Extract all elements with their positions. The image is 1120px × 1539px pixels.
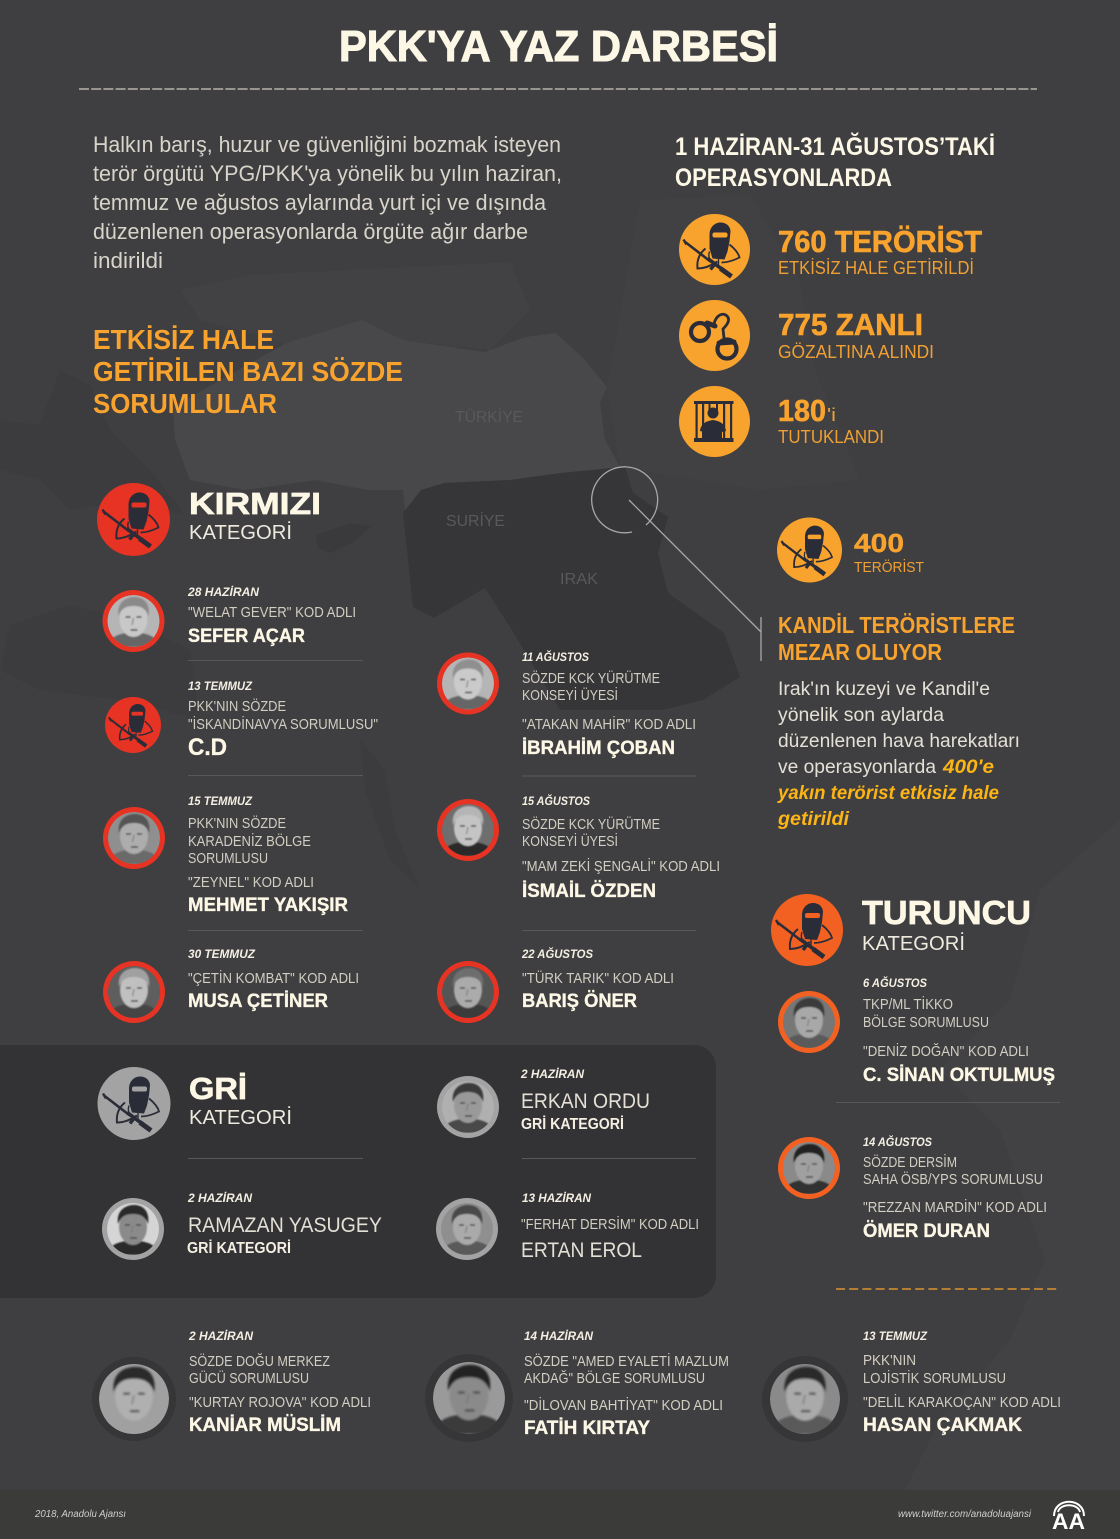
entry: C.D: PKK'NIN SÖZDE xyxy=(188,697,286,715)
entry: Hasan Çakmak xyxy=(762,1329,1061,1442)
entry: Fatih Kırtay: SÖZDE "AMED EYALETİ MAZLUM xyxy=(524,1352,729,1370)
entry: C. Sinan Oktulmuş xyxy=(778,975,1055,1086)
entry: İbrahim Çoban: İBRAHİM ÇOBAN xyxy=(522,736,675,759)
Kandil paragraph: getirildi xyxy=(777,809,850,830)
entry: C. Sinan Oktulmuş: C. SİNAN OKTULMUŞ xyxy=(863,1063,1055,1086)
entry: Ömer Duran: ÖMER DURAN xyxy=(863,1219,990,1242)
heading: neutralized officials: GETİRİLEN BAZI SÖZDE xyxy=(93,356,403,387)
photo xyxy=(436,1198,498,1260)
entry: Kaniar Müslim xyxy=(92,1328,371,1441)
entry: Hasan Çakmak: 13 TEMMUZ xyxy=(863,1329,928,1343)
intro paragraph: düzenlenen operasyonlarda örgüte ağır darbe xyxy=(93,219,528,244)
entry: Sefer Açar xyxy=(102,584,356,652)
entry: Mehmet Yakışır: SORUMLUSU xyxy=(188,851,268,867)
heading: neutralized officials: ETKİSİZ HALE xyxy=(93,324,274,355)
stat: 775 suspects: 775 ZANLI xyxy=(778,307,923,342)
stat: 400 terrorists in Kandil: TERÖRİST xyxy=(854,558,924,576)
photo xyxy=(103,807,165,869)
heading: neutralized officials xyxy=(93,324,403,419)
photo xyxy=(778,991,840,1053)
entry: Erkan Ordu: 2 HAZİRAN xyxy=(520,1066,584,1081)
entry: Kaniar Müslim: 2 HAZİRAN xyxy=(188,1328,253,1343)
entry: Mehmet Yakışır: "ZEYNEL" KOD ADLI xyxy=(188,875,314,891)
entry: Mehmet Yakışır xyxy=(103,794,348,916)
stat: 180 arrested: TUTUKLANDI xyxy=(778,427,884,447)
stat: 760 terrorists: 760 TERÖRİST xyxy=(778,224,982,259)
logo: AA: AA xyxy=(1052,1509,1085,1534)
entry: Ömer Duran xyxy=(778,1134,1047,1242)
icon: red militant xyxy=(97,483,170,556)
entry: İsmail Özden: "MAM ZEKİ ŞENGALİ" KOD ADLI xyxy=(522,857,720,875)
entry: Ertan Erol: ERTAN EROL xyxy=(521,1239,642,1262)
stat: 400 terrorists in Kandil: 400 xyxy=(854,528,904,558)
category: orange: TURUNCU xyxy=(862,894,1031,931)
entry: İsmail Özden xyxy=(437,793,720,902)
intro paragraph: terör örgütü YPG/PKK'ya yönelik bu yılın haziran, xyxy=(93,161,562,186)
entry: İbrahim Çoban: 11 AĞUSTOS xyxy=(522,649,589,664)
footer xyxy=(0,1490,1120,1539)
map locator circle and leader line xyxy=(592,467,761,661)
entry: C. Sinan Oktulmuş: TKP/ML TİKKO xyxy=(863,995,953,1013)
category: red: KIRMIZI xyxy=(189,486,321,521)
entry: C.D: "İSKANDİNAVYA SORUMLUSU" xyxy=(188,715,378,733)
photo xyxy=(103,961,165,1023)
category: orange xyxy=(771,894,1031,966)
category: red: KATEGORİ xyxy=(189,521,292,544)
entry: Ömer Duran: "REZZAN MARDİN" KOD ADLI xyxy=(863,1198,1047,1216)
entry: Erkan Ordu xyxy=(437,1066,650,1138)
entry: Fatih Kırtay: FATİH KIRTAY xyxy=(524,1416,650,1439)
category: red xyxy=(97,483,321,556)
stat: 775 suspects: GÖZALTINA ALINDI xyxy=(778,342,934,362)
entry: Mehmet Yakışır: KARADENİZ BÖLGE xyxy=(188,832,311,850)
entry: İbrahim Çoban xyxy=(437,649,696,759)
icon: prisoner behind bars xyxy=(679,386,750,457)
photo xyxy=(437,652,499,714)
entry: İbrahim Çoban: "ATAKAN MAHİR" KOD ADLI xyxy=(522,715,696,733)
map label: Irak: IRAK xyxy=(560,571,598,588)
stat: 180 arrested: 180 xyxy=(778,393,826,428)
stat: 400 terrorists in Kandil xyxy=(777,518,924,582)
icon: militant xyxy=(777,518,842,582)
entry: Kaniar Müslim: KANİAR MÜSLİM xyxy=(189,1413,341,1436)
icon: militant xyxy=(679,214,750,285)
photo xyxy=(102,590,164,652)
credit: 2018, Anadolu Ajansı xyxy=(34,1509,126,1520)
entry: Erkan Ordu: GRİ KATEGORİ xyxy=(521,1115,624,1133)
title: PKK'YA YAZ DARBESİ xyxy=(339,22,778,71)
intro paragraph xyxy=(93,132,562,273)
entry: Ramazan Yasugey: GRİ KATEGORİ xyxy=(187,1239,291,1257)
photo xyxy=(437,1076,499,1138)
entry: C. Sinan Oktulmuş: "DENİZ DOĞAN" KOD ADLI xyxy=(863,1042,1029,1060)
entry: Ramazan Yasugey xyxy=(102,1190,382,1260)
entry: Sefer Açar: 28 HAZİRAN xyxy=(187,584,259,599)
entry: Mehmet Yakışır: 15 TEMMUZ xyxy=(188,794,253,808)
entry: Ömer Duran: SÖZDE DERSİM xyxy=(863,1153,957,1171)
entry: Ertan Erol: "FERHAT DERSİM" KOD ADLI xyxy=(521,1215,699,1233)
entry: C. Sinan Oktulmuş: 6 AĞUSTOS xyxy=(863,975,927,990)
entry: Fatih Kırtay: "DİLOVAN BAHTİYAT" KOD ADLI xyxy=(524,1396,723,1414)
entry: Barış Öner: 22 AĞUSTOS xyxy=(521,946,593,961)
stat: 180 arrested: 'i xyxy=(827,405,836,425)
heading: Kandil: MEZAR OLUYOR xyxy=(778,639,942,665)
panel: grey category xyxy=(0,1045,716,1298)
stat: 180 arrested xyxy=(679,386,884,457)
operations heading: OPERASYONLARDA xyxy=(675,164,892,192)
stat: 760 terrorists xyxy=(679,214,982,285)
heading: neutralized officials: SORUMLULAR xyxy=(93,388,277,419)
entry: Ömer Duran: 14 AĞUSTOS xyxy=(863,1134,932,1149)
Kandil paragraph xyxy=(777,679,1020,830)
entry: Kaniar Müslim: "KURTAY ROJOVA" KOD ADLI xyxy=(189,1395,371,1411)
entry: Erkan Ordu: ERKAN ORDU xyxy=(521,1090,650,1113)
map label: Türkiye: TÜRKİYE xyxy=(455,407,523,426)
entry: Hasan Çakmak: HASAN ÇAKMAK xyxy=(863,1414,1022,1436)
photo xyxy=(425,1354,513,1442)
heading: Kandil xyxy=(778,612,1015,665)
photo xyxy=(778,1137,840,1199)
heading: Kandil: KANDİL TERÖRİSTLERE xyxy=(778,612,1015,638)
map label: Suriye: SURİYE xyxy=(446,511,505,530)
entry: Sefer Açar: SEFER AÇAR xyxy=(188,625,305,647)
photo xyxy=(437,961,499,1023)
entry: Musa Çetiner: 30 TEMMUZ xyxy=(188,947,256,961)
Kandil paragraph: yönelik son aylarda xyxy=(778,705,944,726)
entry: Hasan Çakmak: "DELİL KARAKOÇAN" KOD ADLI xyxy=(863,1393,1061,1411)
icon: red militant small xyxy=(105,697,161,753)
stat: 775 suspects xyxy=(679,300,934,371)
icon: grey militant xyxy=(98,1067,170,1140)
entry: Ramazan Yasugey: RAMAZAN YASUGEY xyxy=(188,1214,382,1237)
entry: Fatih Kırtay xyxy=(425,1328,729,1442)
Kandil paragraph: yakın terörist etkisiz hale xyxy=(777,783,999,804)
entry: Barış Öner: "TÜRK TARIK" KOD ADLI xyxy=(522,969,674,987)
Kandil paragraph: düzenlenen hava harekatları xyxy=(778,731,1020,752)
entry: Ramazan Yasugey: 2 HAZİRAN xyxy=(187,1190,252,1205)
entry: C. Sinan Oktulmuş: BÖLGE SORUMLUSU xyxy=(863,1013,989,1031)
operations heading: 1 HAZİRAN-31 AĞUSTOS’TAKİ xyxy=(675,132,995,161)
entry: Hasan Çakmak: LOJİSTİK SORUMLUSU xyxy=(863,1369,1006,1387)
operations heading xyxy=(675,132,995,192)
entry: Ertan Erol xyxy=(436,1190,699,1262)
entry: C.D: 13 TEMMUZ xyxy=(188,679,253,693)
entry: İbrahim Çoban: KONSEYİ ÜYESİ xyxy=(522,686,618,704)
category: grey: KATEGORİ xyxy=(189,1106,292,1129)
category: grey xyxy=(98,1067,292,1140)
category: orange: KATEGORİ xyxy=(862,932,965,955)
photo xyxy=(102,1198,164,1260)
photo xyxy=(437,799,499,861)
entry: İsmail Özden: KONSEYİ ÜYESİ xyxy=(522,832,618,850)
intro paragraph: temmuz ve ağustos aylarında yurt içi ve dışında xyxy=(93,190,547,215)
entry: C.D xyxy=(105,679,378,761)
entry: Barış Öner: BARIŞ ÖNER xyxy=(522,989,637,1012)
entry: Musa Çetiner: "ÇETİN KOMBAT" KOD ADLI xyxy=(188,969,359,987)
entry: Sefer Açar: "WELAT GEVER" KOD ADLI xyxy=(188,605,356,621)
icon: handcuffs xyxy=(679,300,750,371)
entry: Ertan Erol: 13 HAZİRAN xyxy=(522,1190,591,1205)
entry: Kaniar Müslim: GÜCÜ SORUMLUSU xyxy=(189,1369,309,1387)
photo xyxy=(92,1357,176,1441)
entry: Barış Öner xyxy=(437,946,674,1023)
category: grey: GRİ xyxy=(189,1071,247,1106)
Kandil paragraph: 400'e xyxy=(942,757,994,778)
stat: 760 terrorists: ETKİSİZ HALE GETİRİLDİ xyxy=(778,258,974,278)
entry: Mehmet Yakışır: MEHMET YAKIŞIR xyxy=(188,894,348,916)
entry: Ömer Duran: SAHA ÖSB/YPS SORUMLUSU xyxy=(863,1170,1043,1188)
entry: İsmail Özden: 15 AĞUSTOS xyxy=(522,793,590,808)
photo xyxy=(762,1356,848,1442)
intro paragraph: Halkın barış, huzur ve güvenliğini bozmak isteyen xyxy=(93,132,561,157)
entry: Fatih Kırtay: 14 HAZİRAN xyxy=(524,1328,593,1343)
icon: orange militant xyxy=(771,894,843,966)
entry: C.D: C.D xyxy=(188,734,227,761)
intro paragraph: indirildi xyxy=(93,248,163,273)
entry: Fatih Kırtay: AKDAĞ" BÖLGE SORUMLUSU xyxy=(524,1369,705,1387)
twitter address: www.twitter.com/anadoluajansi xyxy=(898,1509,1032,1520)
entry: İsmail Özden: İSMAİL ÖZDEN xyxy=(522,879,656,902)
Kandil paragraph: ve operasyonlarda xyxy=(778,757,936,778)
entry: İsmail Özden: SÖZDE KCK YÜRÜTME xyxy=(522,815,660,833)
entry: Kaniar Müslim: SÖZDE DOĞU MERKEZ xyxy=(189,1352,330,1370)
entry: İbrahim Çoban: SÖZDE KCK YÜRÜTME xyxy=(522,669,660,687)
entry: Hasan Çakmak: PKK'NIN xyxy=(863,1353,916,1369)
entry: Mehmet Yakışır: PKK'NIN SÖZDE xyxy=(188,814,286,832)
Kandil paragraph: Irak'ın kuzeyi ve Kandil'e xyxy=(778,679,990,700)
entry: Musa Çetiner: MUSA ÇETİNER xyxy=(188,989,328,1012)
entry: Musa Çetiner xyxy=(103,947,359,1023)
